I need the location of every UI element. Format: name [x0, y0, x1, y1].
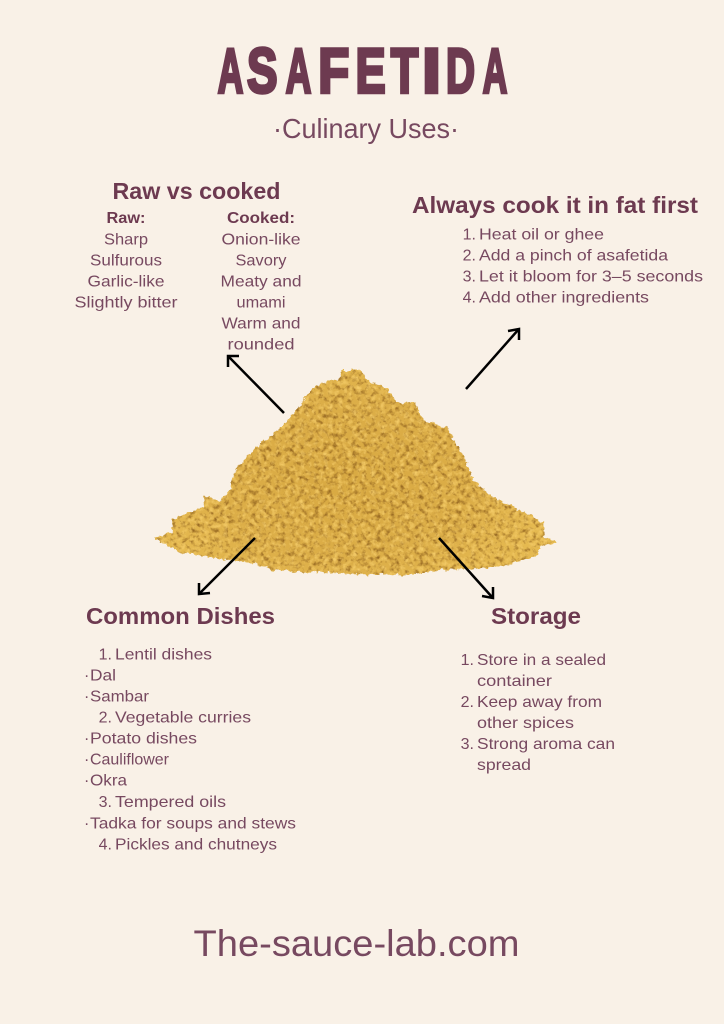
dish list: Potato dishes: [90, 730, 197, 748]
numbered steps: 3.: [463, 268, 476, 286]
column: raw: Sharp: [104, 232, 148, 248]
dish list: Tempered oils: [115, 794, 226, 811]
numbered steps: 4.: [463, 290, 476, 306]
dish list: Cauliflower: [90, 752, 170, 768]
dish list: Vegetable curries: [115, 710, 251, 726]
storage list: 3.: [461, 736, 474, 753]
storage list: Strong aroma can: [477, 736, 615, 753]
numbered steps: 1.: [463, 226, 476, 244]
panel: always cook it in fat first: [412, 192, 703, 306]
heading: common dishes: Common Dishes: [86, 603, 275, 629]
dish list: 2.: [99, 710, 112, 726]
numbered steps: Add other ingredients: [479, 290, 649, 306]
column: cooked: Meaty and: [220, 274, 302, 290]
arrow: to always cook it in fat first: [466, 329, 519, 389]
dish list: Lentil dishes: [115, 646, 212, 664]
dish list: Pickles and chutneys: [115, 836, 277, 854]
storage list: 2.: [461, 694, 474, 711]
column: raw: [74, 210, 178, 312]
storage list: 1.: [461, 652, 474, 669]
title: A: [218, 36, 243, 106]
dish list: ·: [84, 816, 89, 832]
title: A: [286, 36, 311, 106]
title: [218, 36, 507, 106]
heading: storage: Storage: [491, 603, 581, 629]
title: T: [391, 36, 418, 106]
dish list: 4.: [99, 836, 112, 854]
column: cooked: [220, 210, 302, 354]
storage list: Store in a sealed: [477, 652, 606, 669]
dish list: ·: [84, 688, 89, 706]
title: I: [422, 36, 441, 106]
arrow: to storage: [439, 538, 493, 598]
column: cooked: Savory: [236, 252, 286, 270]
column: cooked: rounded: [228, 336, 294, 354]
panel: storage: [461, 603, 615, 774]
dish list: ·: [84, 752, 89, 768]
numbered steps: Heat oil or ghee: [479, 226, 604, 244]
column: cooked: Cooked:: [227, 210, 295, 227]
subtitle: ·Culinary Uses·: [273, 113, 459, 144]
title: S: [247, 36, 278, 106]
dish list: Okra: [90, 772, 127, 790]
storage list: other spices: [477, 715, 574, 732]
storage list: container: [477, 673, 553, 690]
dish list: ·: [84, 772, 89, 790]
dish list: ·: [84, 668, 89, 684]
panel: raw vs cooked: [74, 178, 302, 354]
panel: common dishes: [84, 603, 296, 854]
heading: always cook it in fat first: Always cook it in fat first: [412, 192, 698, 218]
arrow: to common dishes: [199, 538, 255, 594]
column: cooked: Warm and: [222, 316, 300, 332]
dish list: [84, 646, 296, 854]
column: raw: Garlic-like: [88, 274, 165, 290]
dish list: ·: [84, 730, 89, 748]
column: raw: Raw:: [106, 210, 146, 227]
image: asafetida powder pile: [154, 370, 558, 575]
dish list: Dal: [90, 668, 116, 684]
numbered steps: Let it bloom for 3–5 seconds: [479, 268, 703, 286]
storage list: spread: [477, 757, 531, 774]
dish list: 1.: [99, 646, 112, 664]
title: D: [446, 36, 475, 106]
title: A: [483, 36, 507, 106]
storage list: Keep away from: [477, 694, 602, 711]
numbered steps: Add a pinch of asafetida: [479, 248, 668, 264]
heading: raw vs cooked: Raw vs cooked: [112, 178, 280, 204]
dish list: Tadka for soups and stews: [90, 816, 296, 832]
storage list: [461, 652, 615, 774]
numbered steps: 2.: [463, 248, 476, 264]
numbered steps: [463, 226, 703, 306]
title: E: [356, 36, 386, 106]
dish list: Sambar: [90, 688, 150, 706]
column: raw: Slightly bitter: [74, 294, 178, 312]
column: raw: Sulfurous: [90, 252, 162, 270]
arrow: to raw vs cooked: [228, 356, 284, 413]
title: F: [318, 36, 349, 106]
dish list: 3.: [99, 794, 112, 811]
column: cooked: umami: [236, 294, 286, 312]
column: cooked: Onion-like: [222, 232, 301, 248]
footer: website: The-sauce-lab.com: [194, 923, 520, 964]
